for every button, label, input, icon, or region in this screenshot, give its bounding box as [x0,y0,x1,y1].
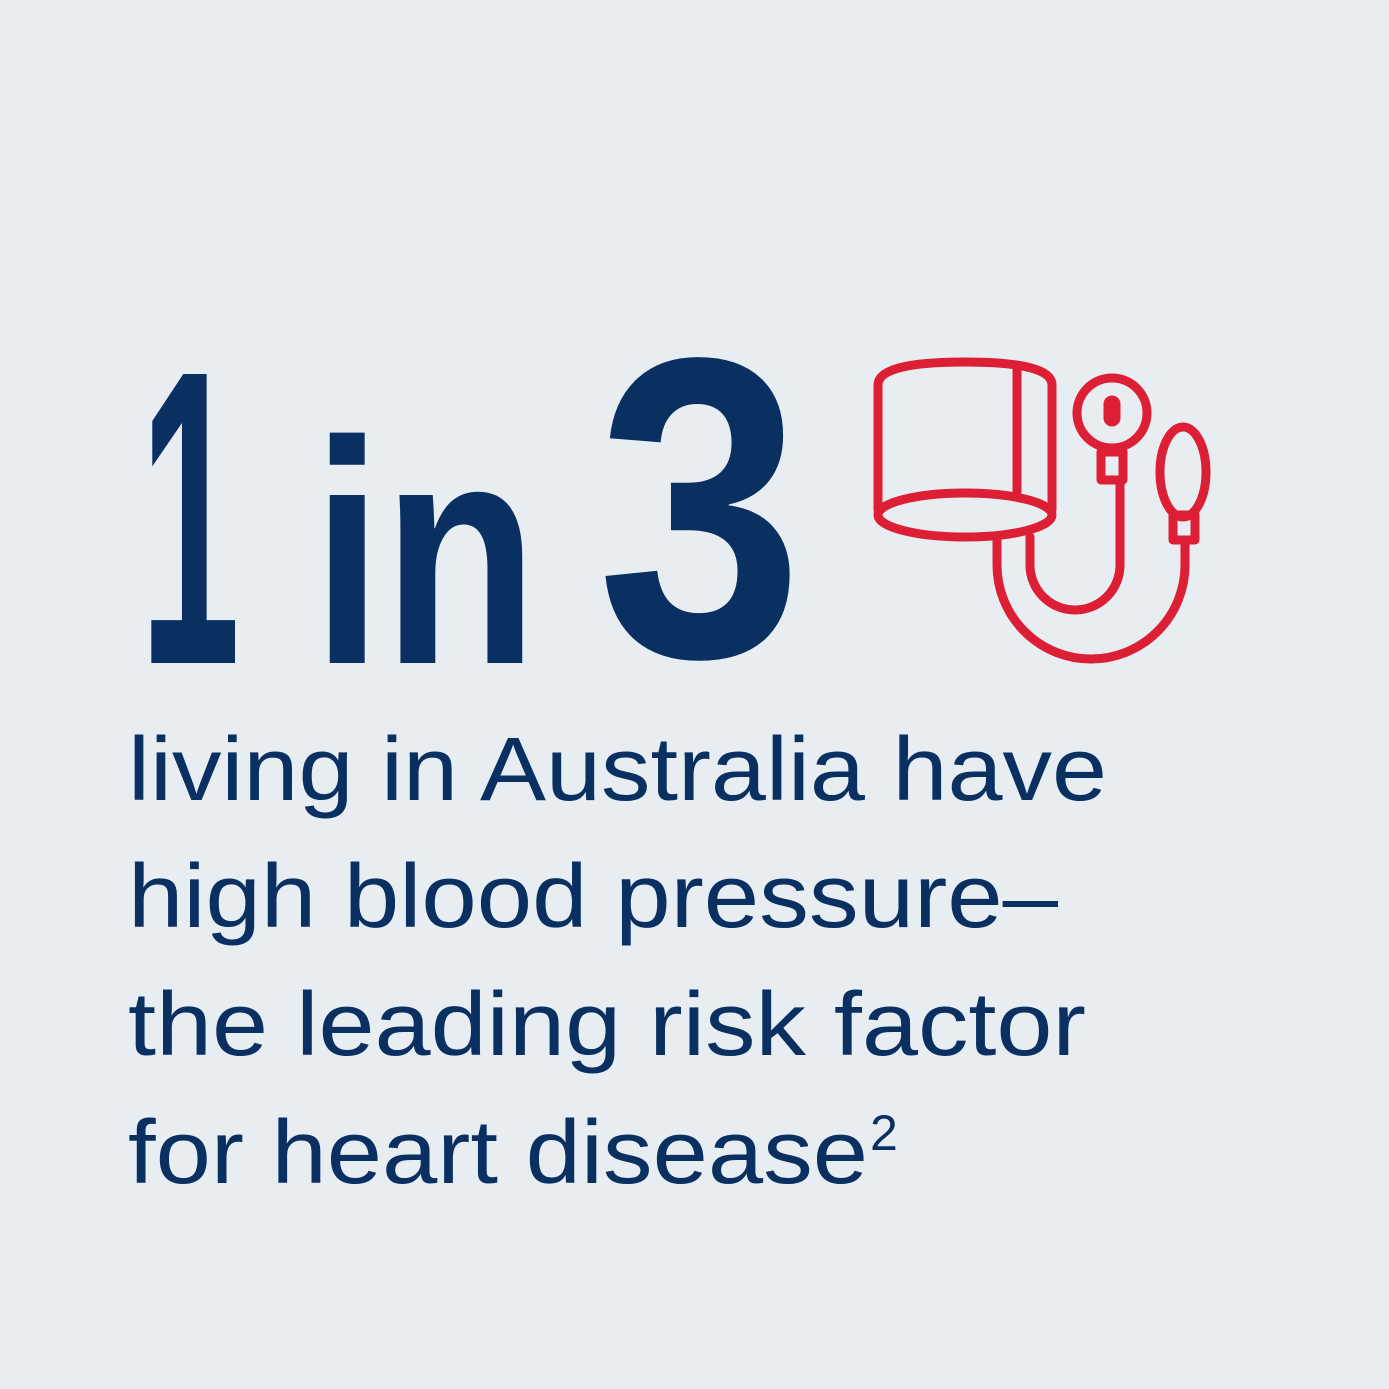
icon: blood pressure monitor [878,362,1206,659]
body text: 2 [870,1105,898,1161]
headline: 1 in 3 [140,269,803,753]
headline: 1 in 3: in [312,376,538,731]
body text: the leading risk factor [128,975,1086,1075]
body text: for heart disease [128,1103,868,1203]
headline: 1 in 3: 3 [597,269,803,747]
headline: 1 in 3: 1 [140,284,240,753]
body text: living in Australia have [128,720,1107,820]
body text [128,720,1107,1203]
body text: high blood pressure– [128,847,1059,947]
